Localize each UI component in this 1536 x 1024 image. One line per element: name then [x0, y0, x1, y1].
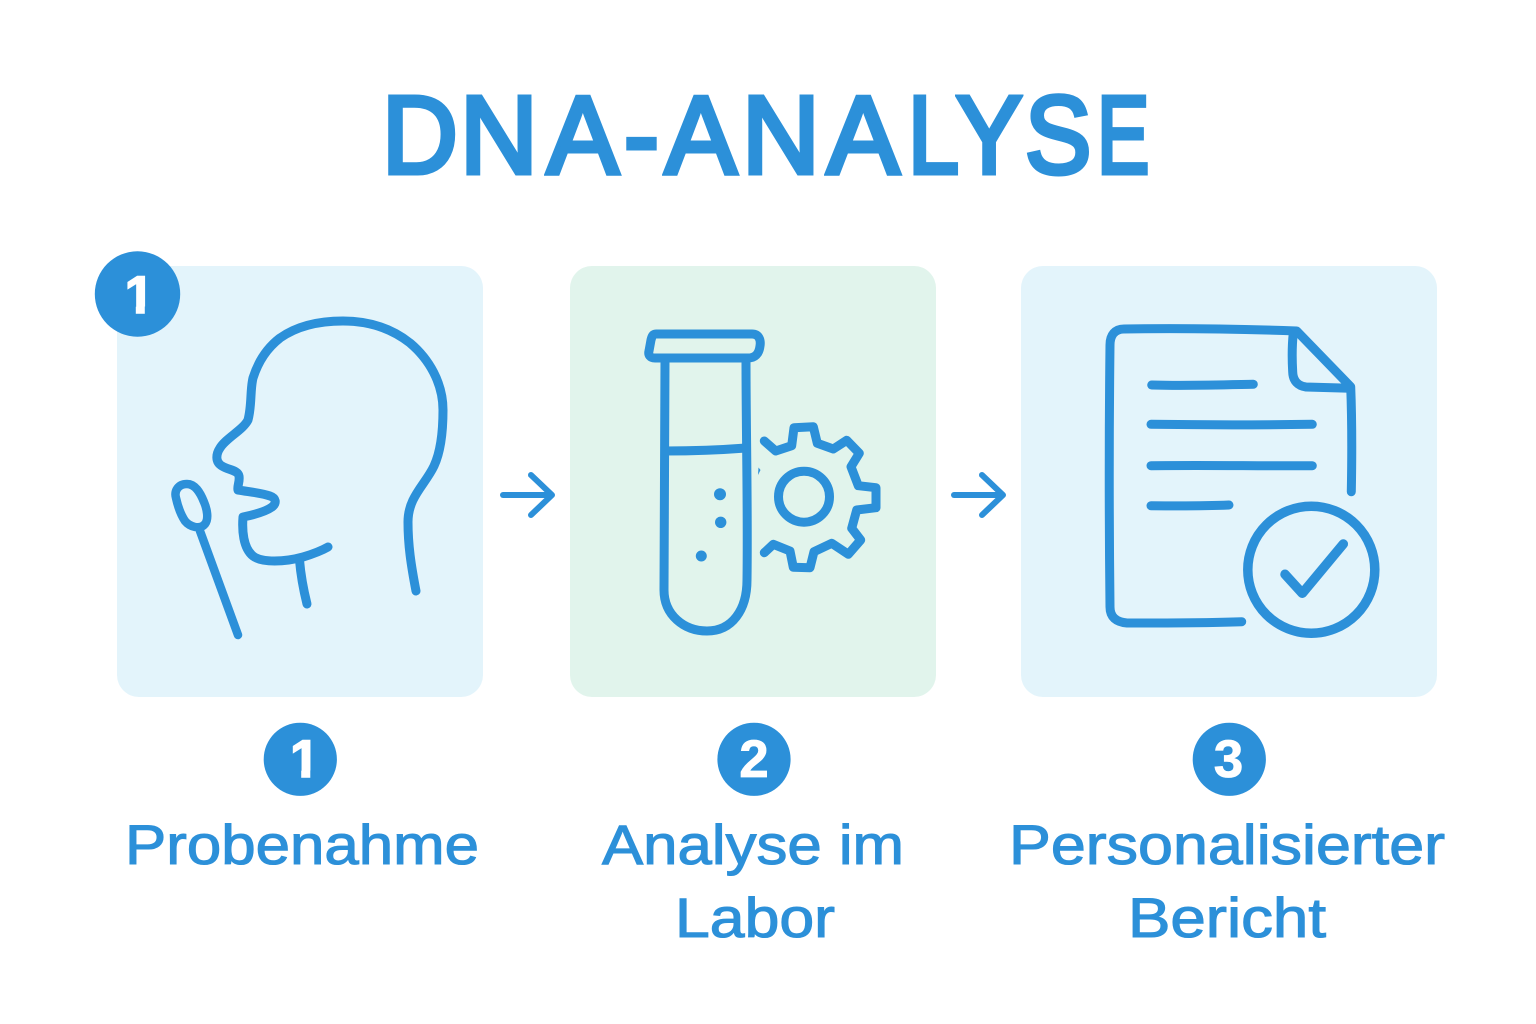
title: Y: [956, 74, 1022, 197]
step 2 label: Analyse im: [602, 813, 904, 876]
step 3 label: [1009, 723, 1445, 949]
badge: step 1 corner: [95, 251, 180, 337]
icon: gear: [764, 427, 876, 568]
icon: bubbles: [696, 488, 726, 562]
step 2 label: [602, 723, 904, 949]
title: -: [624, 74, 659, 197]
icon: swab: [175, 484, 238, 635]
title: L: [908, 74, 959, 197]
panel: Analyse im Labor: [570, 266, 936, 697]
icon: test tube: [649, 334, 760, 631]
badge: step 1 corner: 1: [125, 266, 154, 325]
title: D: [382, 74, 457, 197]
title: A: [665, 74, 737, 197]
title: S: [1025, 74, 1091, 197]
title: N: [460, 74, 538, 197]
title: [382, 74, 1150, 197]
step 1 label: [125, 723, 479, 876]
title: A: [827, 74, 899, 197]
title: A: [547, 74, 618, 197]
icon: head profile: [217, 321, 443, 604]
step 3 label: 3: [1214, 730, 1243, 789]
step 1 label: 1: [290, 730, 319, 789]
step 1 label: Probenahme: [125, 813, 479, 876]
title: N: [742, 74, 820, 197]
step 3 label: Bericht: [1128, 886, 1326, 949]
arrow: step 1 to 2: [503, 475, 552, 515]
panel: Personalisierter Bericht: [1021, 266, 1437, 697]
step 2 label: 2: [739, 730, 769, 789]
step 2 label: Labor: [675, 886, 835, 949]
icon: check circle: [1248, 506, 1375, 633]
step 3 label: Personalisierter: [1009, 813, 1445, 876]
arrow: step 2 to 3: [954, 475, 1003, 515]
title: E: [1097, 74, 1150, 197]
icon: gear speck: [758, 468, 760, 475]
icon: document: [1109, 329, 1352, 623]
panel: Probenahme: [117, 266, 483, 697]
